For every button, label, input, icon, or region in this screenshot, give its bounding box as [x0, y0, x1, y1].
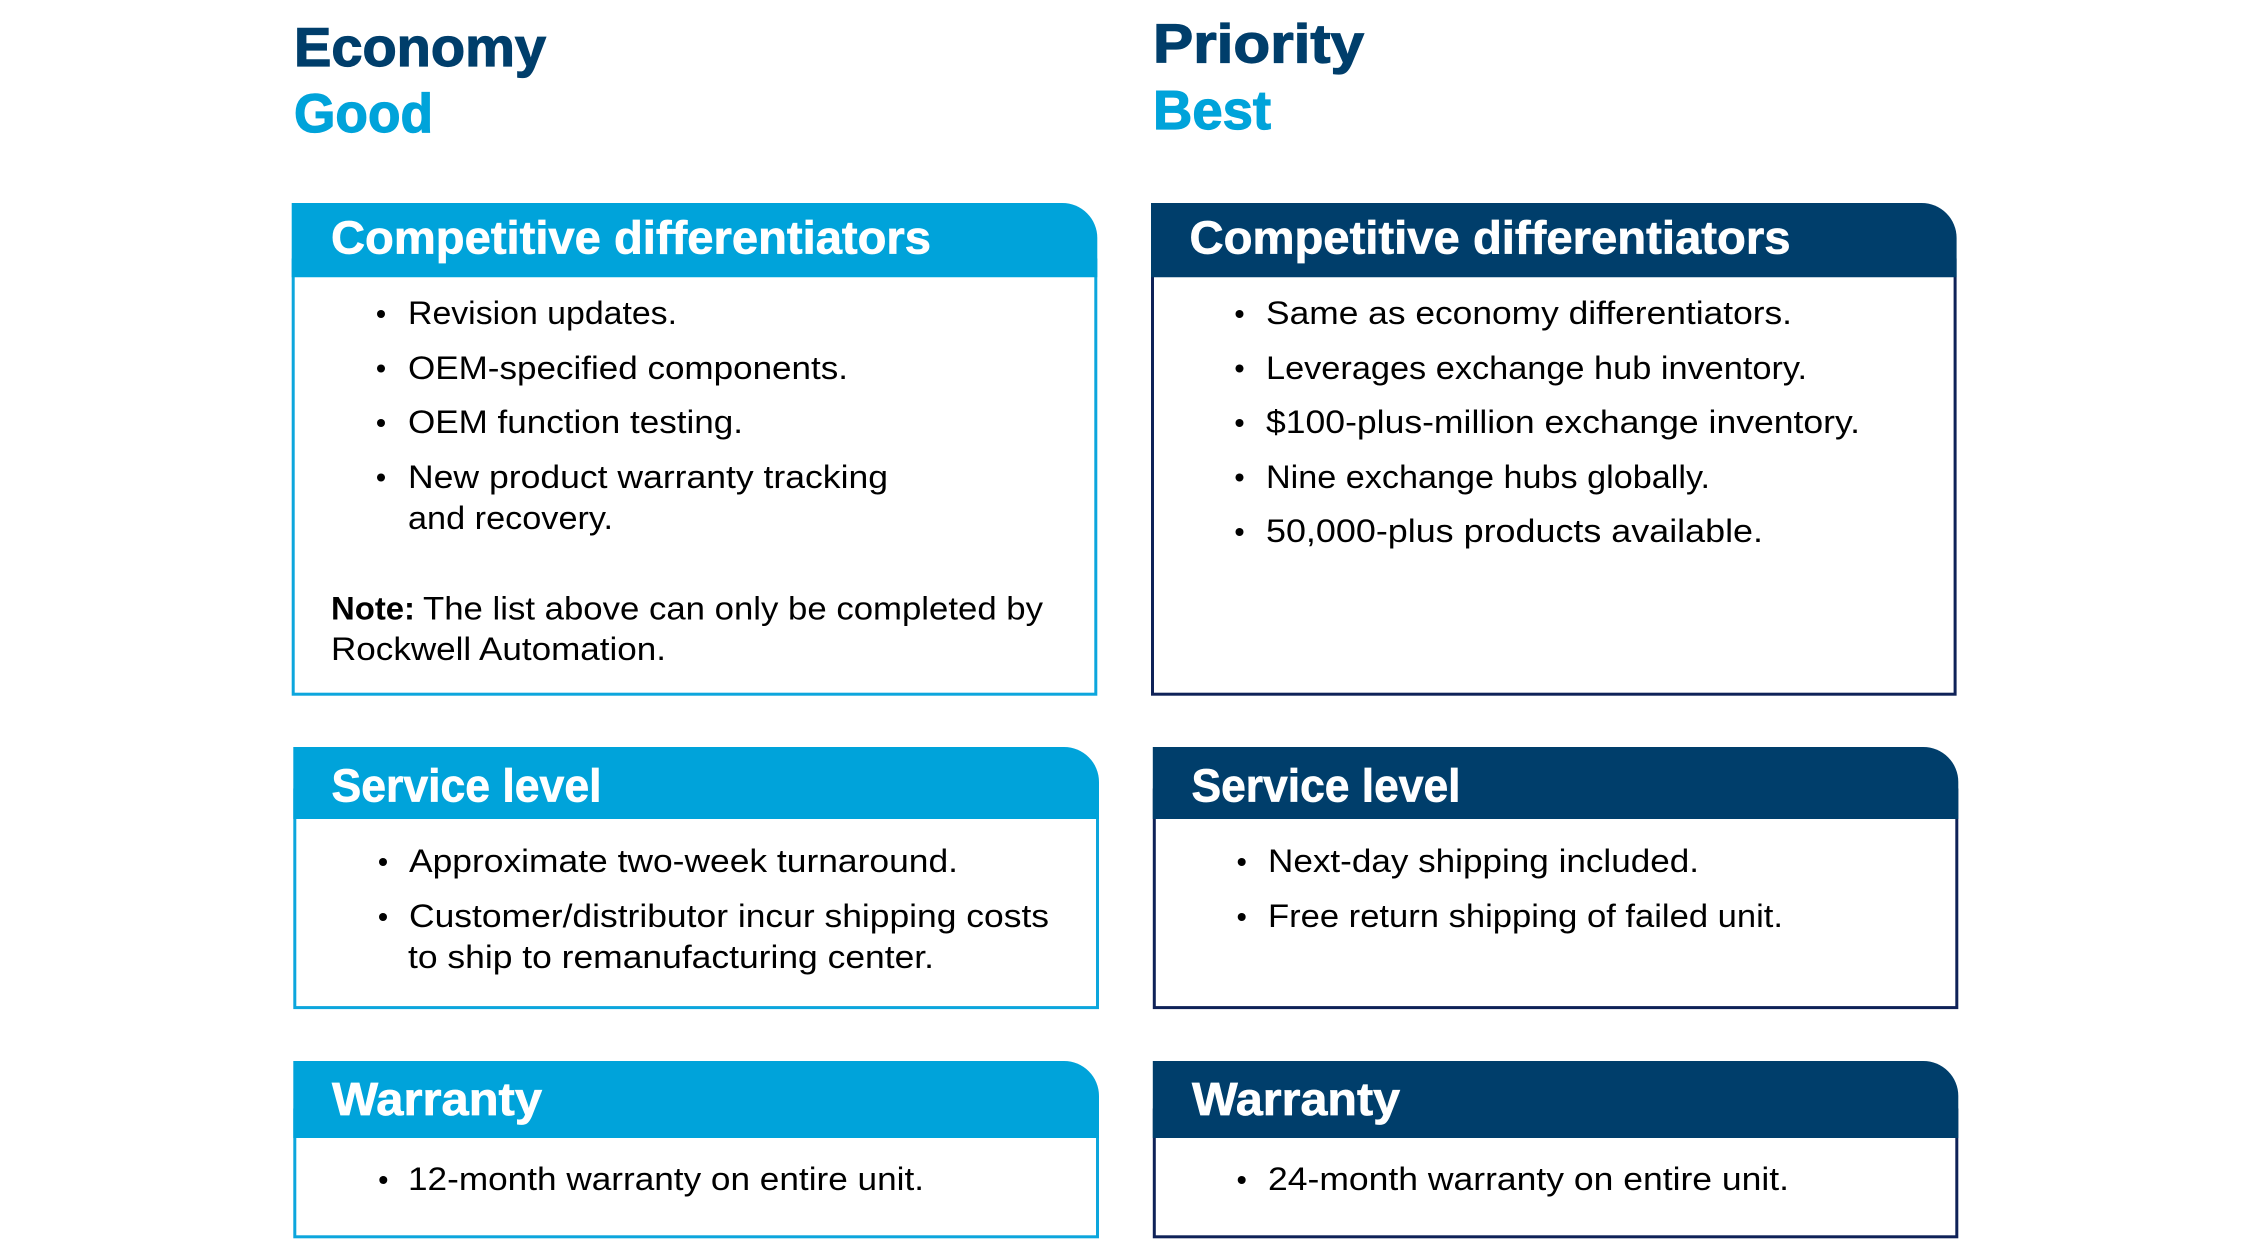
panel: priority warranty: Warranty	[1192, 1073, 1400, 1125]
panel: priority service level: Service level	[1192, 760, 1460, 812]
panel: economy competitive differentiators	[292, 203, 1097, 694]
panel: economy competitive differentiators: Note:	[331, 590, 415, 626]
header bar	[1151, 203, 1957, 277]
heading: Priority Best	[1153, 12, 1364, 141]
panel: economy service level: to ship to remanufacturing center.	[408, 939, 934, 975]
panel: priority competitive differentiators: Nine exchange hubs globally.	[1266, 459, 1710, 495]
panel: priority competitive differentiators: 50,000-plus products available.	[1266, 513, 1763, 549]
panel: economy competitive differentiators: OEM function testing.	[408, 404, 743, 440]
heading: Priority Best: Best	[1153, 79, 1271, 141]
panel: priority competitive differentiators: Competitive differentiators	[1190, 211, 1790, 263]
panel: priority warranty	[1153, 1061, 1958, 1237]
panel: economy service level: Service level	[332, 760, 602, 812]
panel: priority competitive differentiators	[1151, 203, 1957, 694]
panel: economy service level: Customer/distributor incur shipping costs	[409, 898, 1049, 934]
header bar	[1153, 747, 1958, 819]
header bar	[293, 747, 1099, 819]
header bar	[1153, 1061, 1958, 1138]
panel: economy warranty: 12-month warranty on entire unit.	[408, 1161, 924, 1197]
panel: priority competitive differentiators: Same as economy differentiators.	[1266, 295, 1792, 331]
header bar	[292, 203, 1097, 277]
panel: economy competitive differentiators: Revision updates.	[408, 295, 677, 331]
panel: economy competitive differentiators: New product warranty tracking	[408, 459, 888, 495]
panel: economy service level: Approximate two-week turnaround.	[409, 843, 958, 879]
header bar	[293, 1061, 1099, 1138]
heading: Priority Best: Priority	[1153, 12, 1364, 74]
panel: economy competitive differentiators: Competitive differentiators	[331, 211, 931, 263]
panel: priority service level	[1153, 747, 1958, 1008]
panel: priority service level: Free return shipping of failed unit.	[1268, 898, 1783, 934]
panel: economy competitive differentiators: OEM-specified components.	[408, 350, 848, 386]
panel: economy competitive differentiators: and recovery.	[408, 500, 613, 536]
panel: priority service level: Next-day shipping included.	[1268, 843, 1699, 879]
panel: economy competitive differentiators: The list above can only be completed by	[423, 590, 1043, 626]
panel: economy warranty: Warranty	[332, 1073, 542, 1125]
heading: Economy Good: Good	[294, 82, 433, 144]
panel: economy competitive differentiators: Rockwell Automation.	[331, 631, 666, 667]
heading: Economy Good: Economy	[294, 16, 546, 78]
panel: priority competitive differentiators: $100-plus-million exchange inventory.	[1266, 404, 1860, 440]
panel: economy service level	[293, 747, 1099, 1008]
panel: priority competitive differentiators: Leverages exchange hub inventory.	[1266, 350, 1807, 386]
heading: Economy Good	[294, 16, 546, 144]
panel: priority warranty: 24-month warranty on entire unit.	[1268, 1161, 1789, 1197]
panel: economy warranty	[293, 1061, 1099, 1237]
